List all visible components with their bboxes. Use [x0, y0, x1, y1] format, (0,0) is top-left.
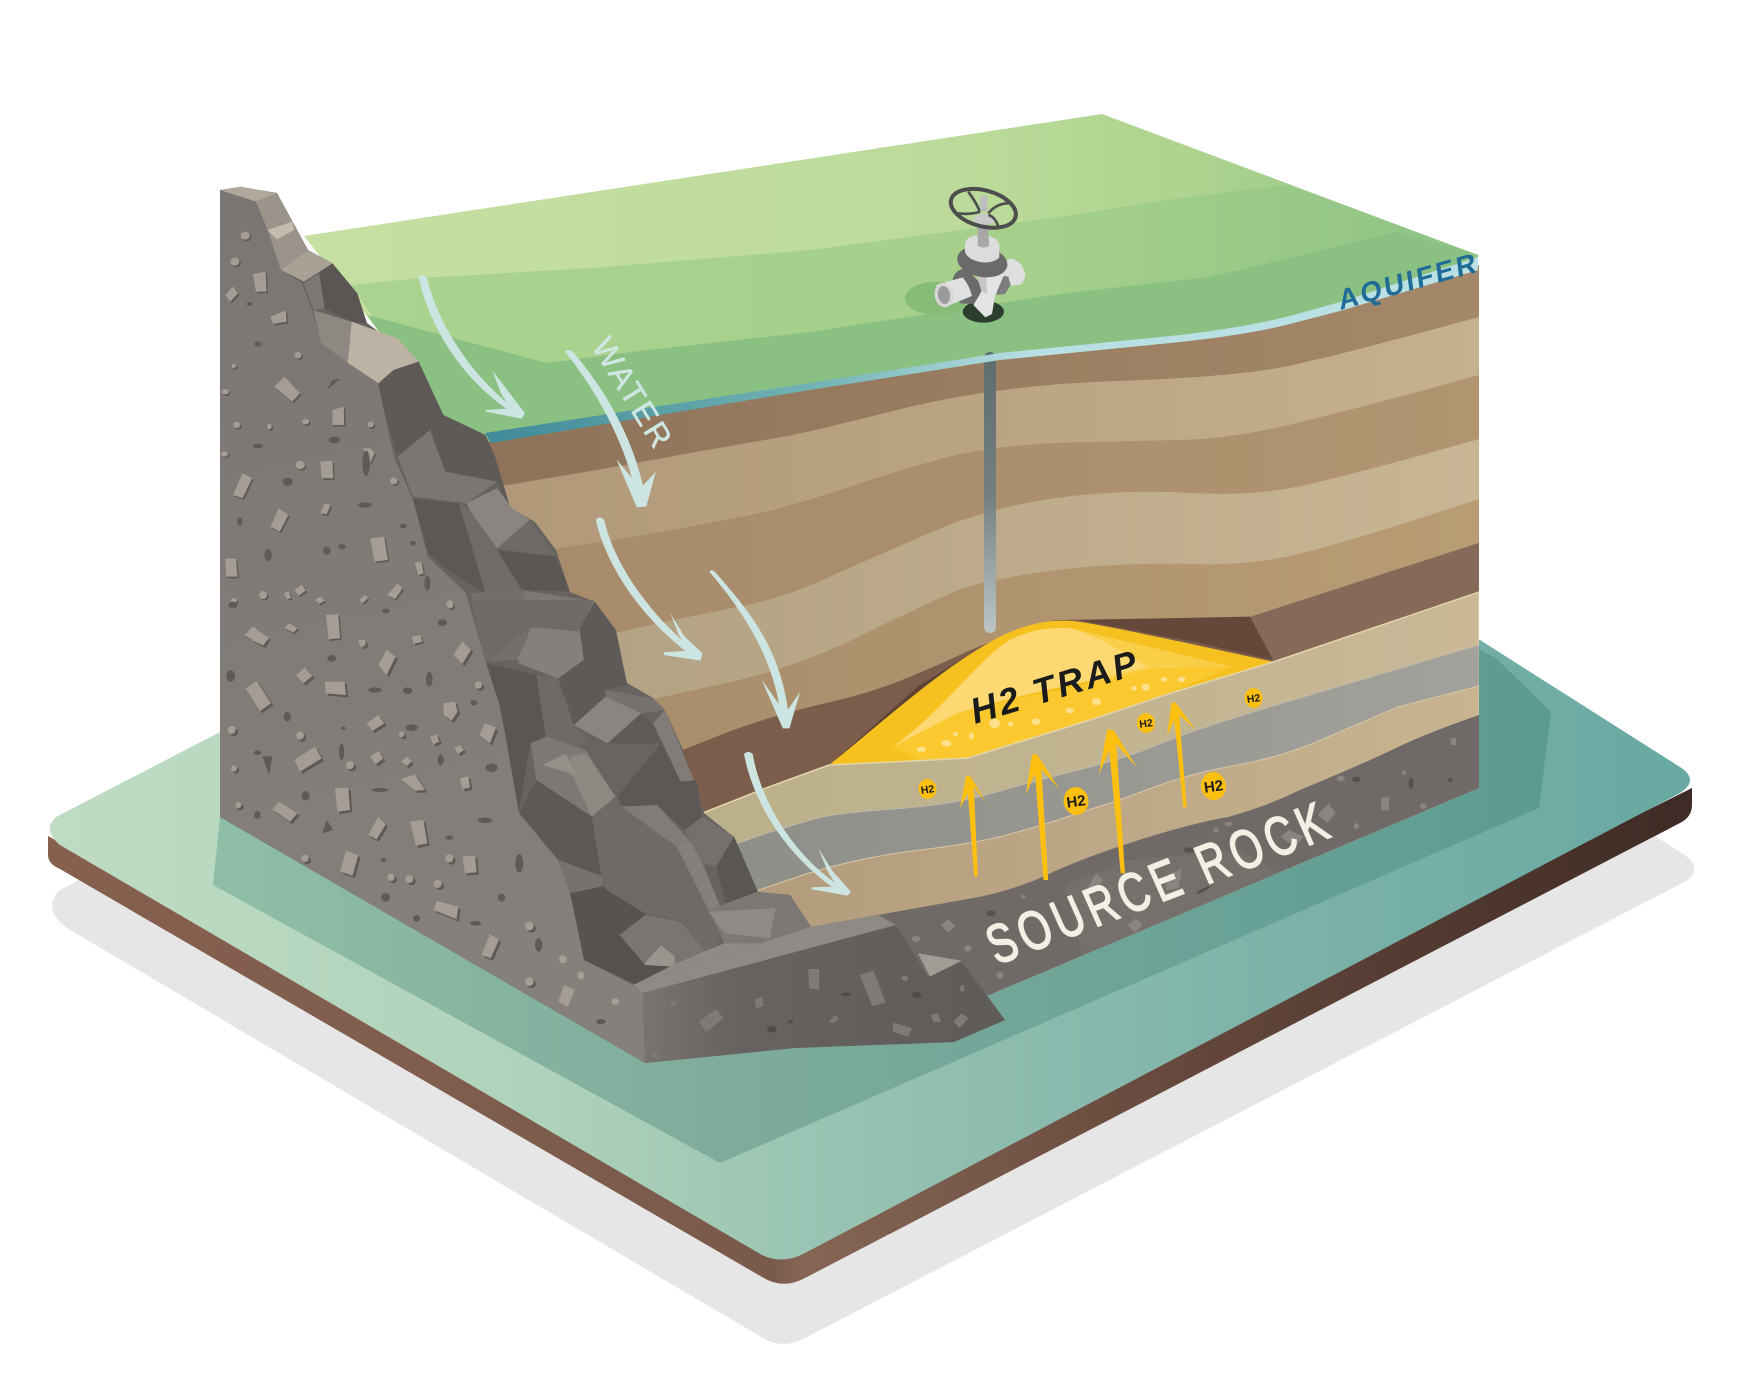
cliff rock fragments: right edge — [558, 955, 619, 1024]
arrow: water 2 — [565, 350, 656, 507]
water arrows: lower — [709, 570, 851, 896]
layer: grey band — [737, 644, 1479, 890]
arrow: water 4 — [709, 570, 800, 728]
scree light shard — [918, 953, 961, 977]
layer: tan reservoir below trap — [704, 591, 1479, 843]
ground surface — [304, 114, 1478, 443]
arrow: H2 up 3 — [1099, 729, 1137, 873]
trap: yellow hydrogen pool — [830, 621, 1273, 767]
H2 badge 1: H2 — [920, 783, 935, 797]
arrow: H2 up 1 — [960, 776, 986, 877]
icon: valve — [905, 182, 1025, 323]
seal left shadow — [830, 651, 975, 764]
label: H2 TRAP: H2 TRAP — [965, 642, 1143, 732]
surface band: dark green — [367, 232, 1478, 443]
cliff upper facets — [220, 187, 625, 680]
scree block front — [643, 925, 1005, 1063]
valve left flange — [953, 269, 983, 304]
cliff lower facets — [471, 600, 811, 985]
arrow: water 5 — [744, 752, 851, 896]
H2 badge 3: H2 — [1139, 717, 1154, 731]
valve stem — [978, 220, 989, 248]
surface band: light green — [304, 114, 1478, 443]
layer: source rock — [814, 715, 1479, 996]
water arrows: upper — [419, 276, 703, 661]
valve ground shadow — [905, 282, 968, 315]
label: SOURCE ROCK: SOURCE ROCK — [977, 792, 1337, 976]
aquifer band — [485, 257, 1478, 443]
layer: dark brown seal — [683, 543, 1479, 812]
well pipe — [984, 352, 996, 633]
label: WATER: WATER — [585, 331, 679, 454]
valve ground hole — [963, 301, 1004, 323]
platform top surface — [50, 640, 1690, 1260]
arrow: H2 up 4 — [1167, 703, 1196, 807]
cliff main face — [220, 190, 645, 1063]
valve right pipe — [998, 258, 1025, 287]
scree fragments — [653, 969, 968, 1057]
arrow: water 3 — [596, 517, 703, 661]
trap lower tone — [893, 667, 1232, 760]
cube shadow on platform — [213, 650, 1551, 1163]
H2 badge 5 — [1243, 687, 1264, 709]
platform side edge — [48, 788, 1692, 1284]
layer: brown 5 — [654, 499, 1479, 750]
layer: lower tan — [757, 686, 1479, 927]
valve stem collar — [974, 214, 996, 225]
arrow: H2 up 2 — [1026, 754, 1059, 880]
layer: brown 3 — [556, 375, 1479, 632]
H2 badge 2 — [1062, 785, 1090, 817]
seal right face — [1250, 543, 1479, 662]
valve collar — [955, 242, 1010, 281]
H2 badge 3 — [1136, 712, 1156, 734]
ground shadow — [52, 820, 1694, 1344]
front strata cross-section — [485, 265, 1479, 1060]
cliff rock mass — [220, 187, 1005, 1063]
valve left pipe — [936, 277, 972, 307]
valve body — [973, 275, 1004, 317]
trap sparkle dots — [917, 677, 1185, 752]
layer: upper brown — [488, 265, 1479, 486]
cliff rock fragments: lower face — [226, 640, 542, 988]
trap mid tone — [1071, 628, 1232, 685]
valve right flange — [997, 275, 1011, 295]
valve wheel — [946, 182, 1020, 234]
cliff — [220, 187, 1005, 1063]
H2 badge 4: H2 — [1203, 777, 1224, 797]
source rock facet — [1083, 873, 1278, 956]
H2 badge 5: H2 — [1246, 692, 1261, 706]
surface band: mid green — [351, 185, 1478, 443]
layer: tan 2 — [504, 317, 1479, 549]
valve spindle top — [980, 196, 987, 212]
cliff rock fragments: upper face — [221, 232, 455, 647]
H2 badge 4 — [1199, 770, 1228, 802]
layer: tan 4 — [616, 439, 1479, 699]
H2 badge 2: H2 — [1065, 792, 1087, 812]
valve pipe opening — [933, 281, 955, 309]
trap highlight — [893, 628, 1148, 747]
H2 badge 1 — [917, 778, 938, 800]
valve body shade — [977, 275, 987, 293]
label: AQUIFER: AQUIFER — [1337, 247, 1478, 316]
arrow: water 1 — [419, 276, 525, 419]
valve bonnet — [965, 235, 999, 262]
scree block top — [633, 915, 896, 993]
hydrogen migration arrows — [960, 703, 1196, 880]
seal shadow wedge — [1079, 617, 1273, 660]
